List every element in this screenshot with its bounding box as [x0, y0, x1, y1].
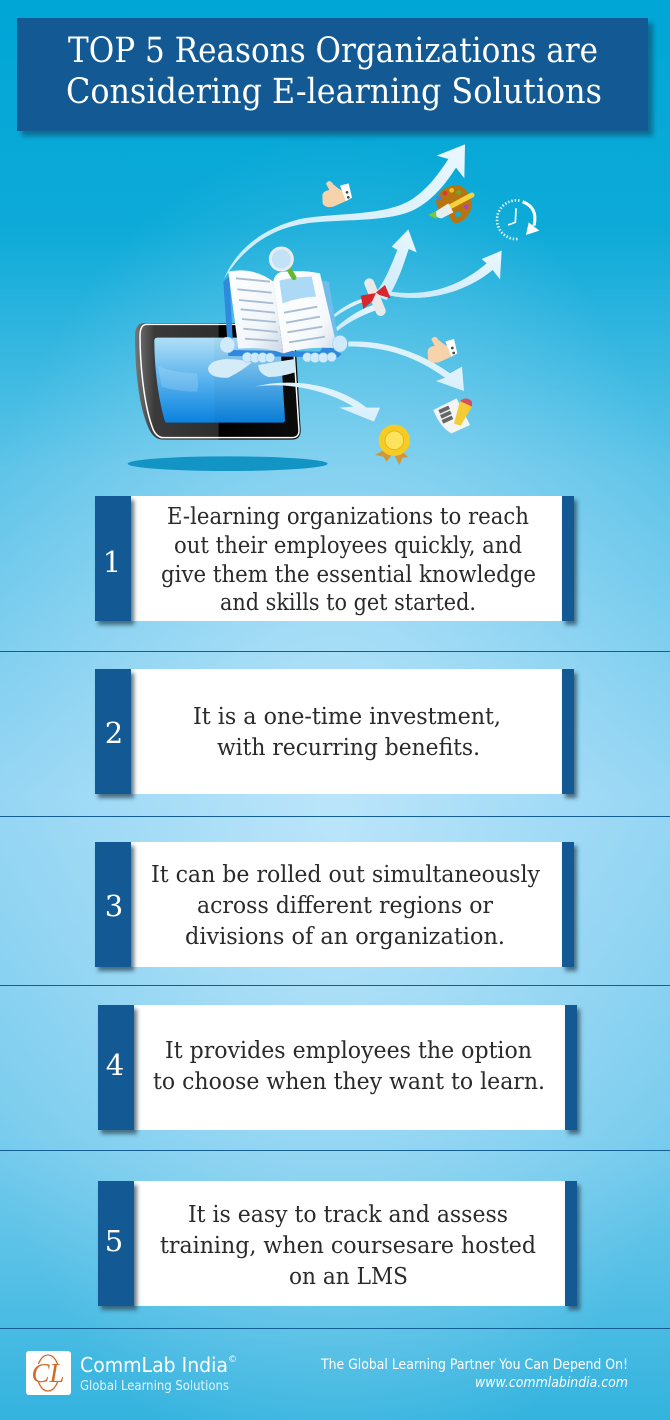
card 3 text: across different regions or	[197, 891, 494, 919]
hand swooshes	[208, 359, 295, 378]
tablet shadow	[128, 456, 328, 471]
website: www.commlabindia.com	[475, 1375, 628, 1391]
icon: diploma scroll with ribbon	[361, 283, 391, 311]
open book	[223, 270, 341, 357]
card 1 text	[161, 502, 536, 616]
tablet screen	[154, 338, 285, 423]
page picture	[279, 277, 316, 303]
title line 2: Considering E-learning Solutions	[66, 72, 602, 112]
registered mark: ©	[228, 1355, 237, 1365]
hero illustration: tablet, book, arrows and icons	[128, 144, 539, 471]
card 4	[98, 1005, 580, 1134]
icon: palette and brush	[428, 185, 472, 223]
card 1 text: and skills to get started.	[220, 588, 476, 616]
card 5 text: It is easy to track and assess	[188, 1200, 508, 1228]
icon: document and pencil	[433, 398, 472, 433]
magnifying glass	[270, 248, 294, 278]
title line 1: TOP 5 Reasons Organizations are	[68, 31, 598, 71]
icon: gold medal	[375, 425, 410, 465]
card 3 text: divisions of an organization.	[185, 922, 505, 950]
number 2: 2	[105, 716, 123, 750]
hands holding book	[220, 335, 347, 363]
card 3	[95, 842, 577, 971]
card 4 text: to choose when they want to learn.	[153, 1067, 545, 1095]
arrow: lower right	[348, 342, 464, 391]
page lines	[236, 278, 325, 342]
number 3: 3	[105, 889, 123, 923]
card 2	[95, 669, 577, 798]
number 1: 1	[103, 545, 121, 579]
card 4 text	[153, 1036, 545, 1095]
number 5: 5	[105, 1224, 123, 1258]
icon: thumbs up top	[322, 181, 352, 207]
title banner	[17, 18, 653, 136]
slogan: The Global Learning Partner You Can Depend On!	[320, 1357, 628, 1373]
card 1 text: give them the essential knowledge	[161, 560, 536, 588]
card 5	[98, 1181, 580, 1310]
brand tagline: Global Learning Solutions	[80, 1378, 229, 1394]
card 5 text: on an LMS	[289, 1262, 408, 1290]
arrow: lower	[255, 383, 380, 422]
arrow: top curve	[224, 144, 465, 279]
right page	[273, 271, 337, 353]
card 4 text: It provides employees the option	[165, 1036, 532, 1064]
footer	[26, 1351, 628, 1395]
arrow: right middle	[390, 251, 502, 298]
card 2 text	[193, 702, 501, 761]
logo mark: CL	[31, 1358, 65, 1388]
number 4: 4	[106, 1048, 124, 1082]
card 1	[95, 496, 577, 625]
arrow: upper middle	[333, 229, 417, 331]
left page	[228, 270, 283, 353]
book cover	[223, 277, 341, 357]
card 3 text	[151, 860, 541, 950]
logo mark	[26, 1351, 71, 1395]
card 1 text: out their employees quickly, and	[174, 531, 522, 559]
card 5 text	[160, 1200, 536, 1290]
icon: clock	[497, 200, 539, 239]
icon: thumbs up lower	[428, 337, 457, 363]
tablet	[135, 323, 301, 440]
dividers	[0, 652, 670, 1328]
card 2 text: with recurring benefits.	[217, 733, 480, 761]
brand name: CommLab India	[80, 1353, 228, 1377]
card 1 text: E-learning organizations to reach	[167, 502, 529, 530]
card 2 text: It is a one-time investment,	[193, 702, 501, 730]
card 5 text: training, when coursesare hosted	[160, 1231, 536, 1259]
card 3 text: It can be rolled out simultaneously	[151, 860, 541, 888]
